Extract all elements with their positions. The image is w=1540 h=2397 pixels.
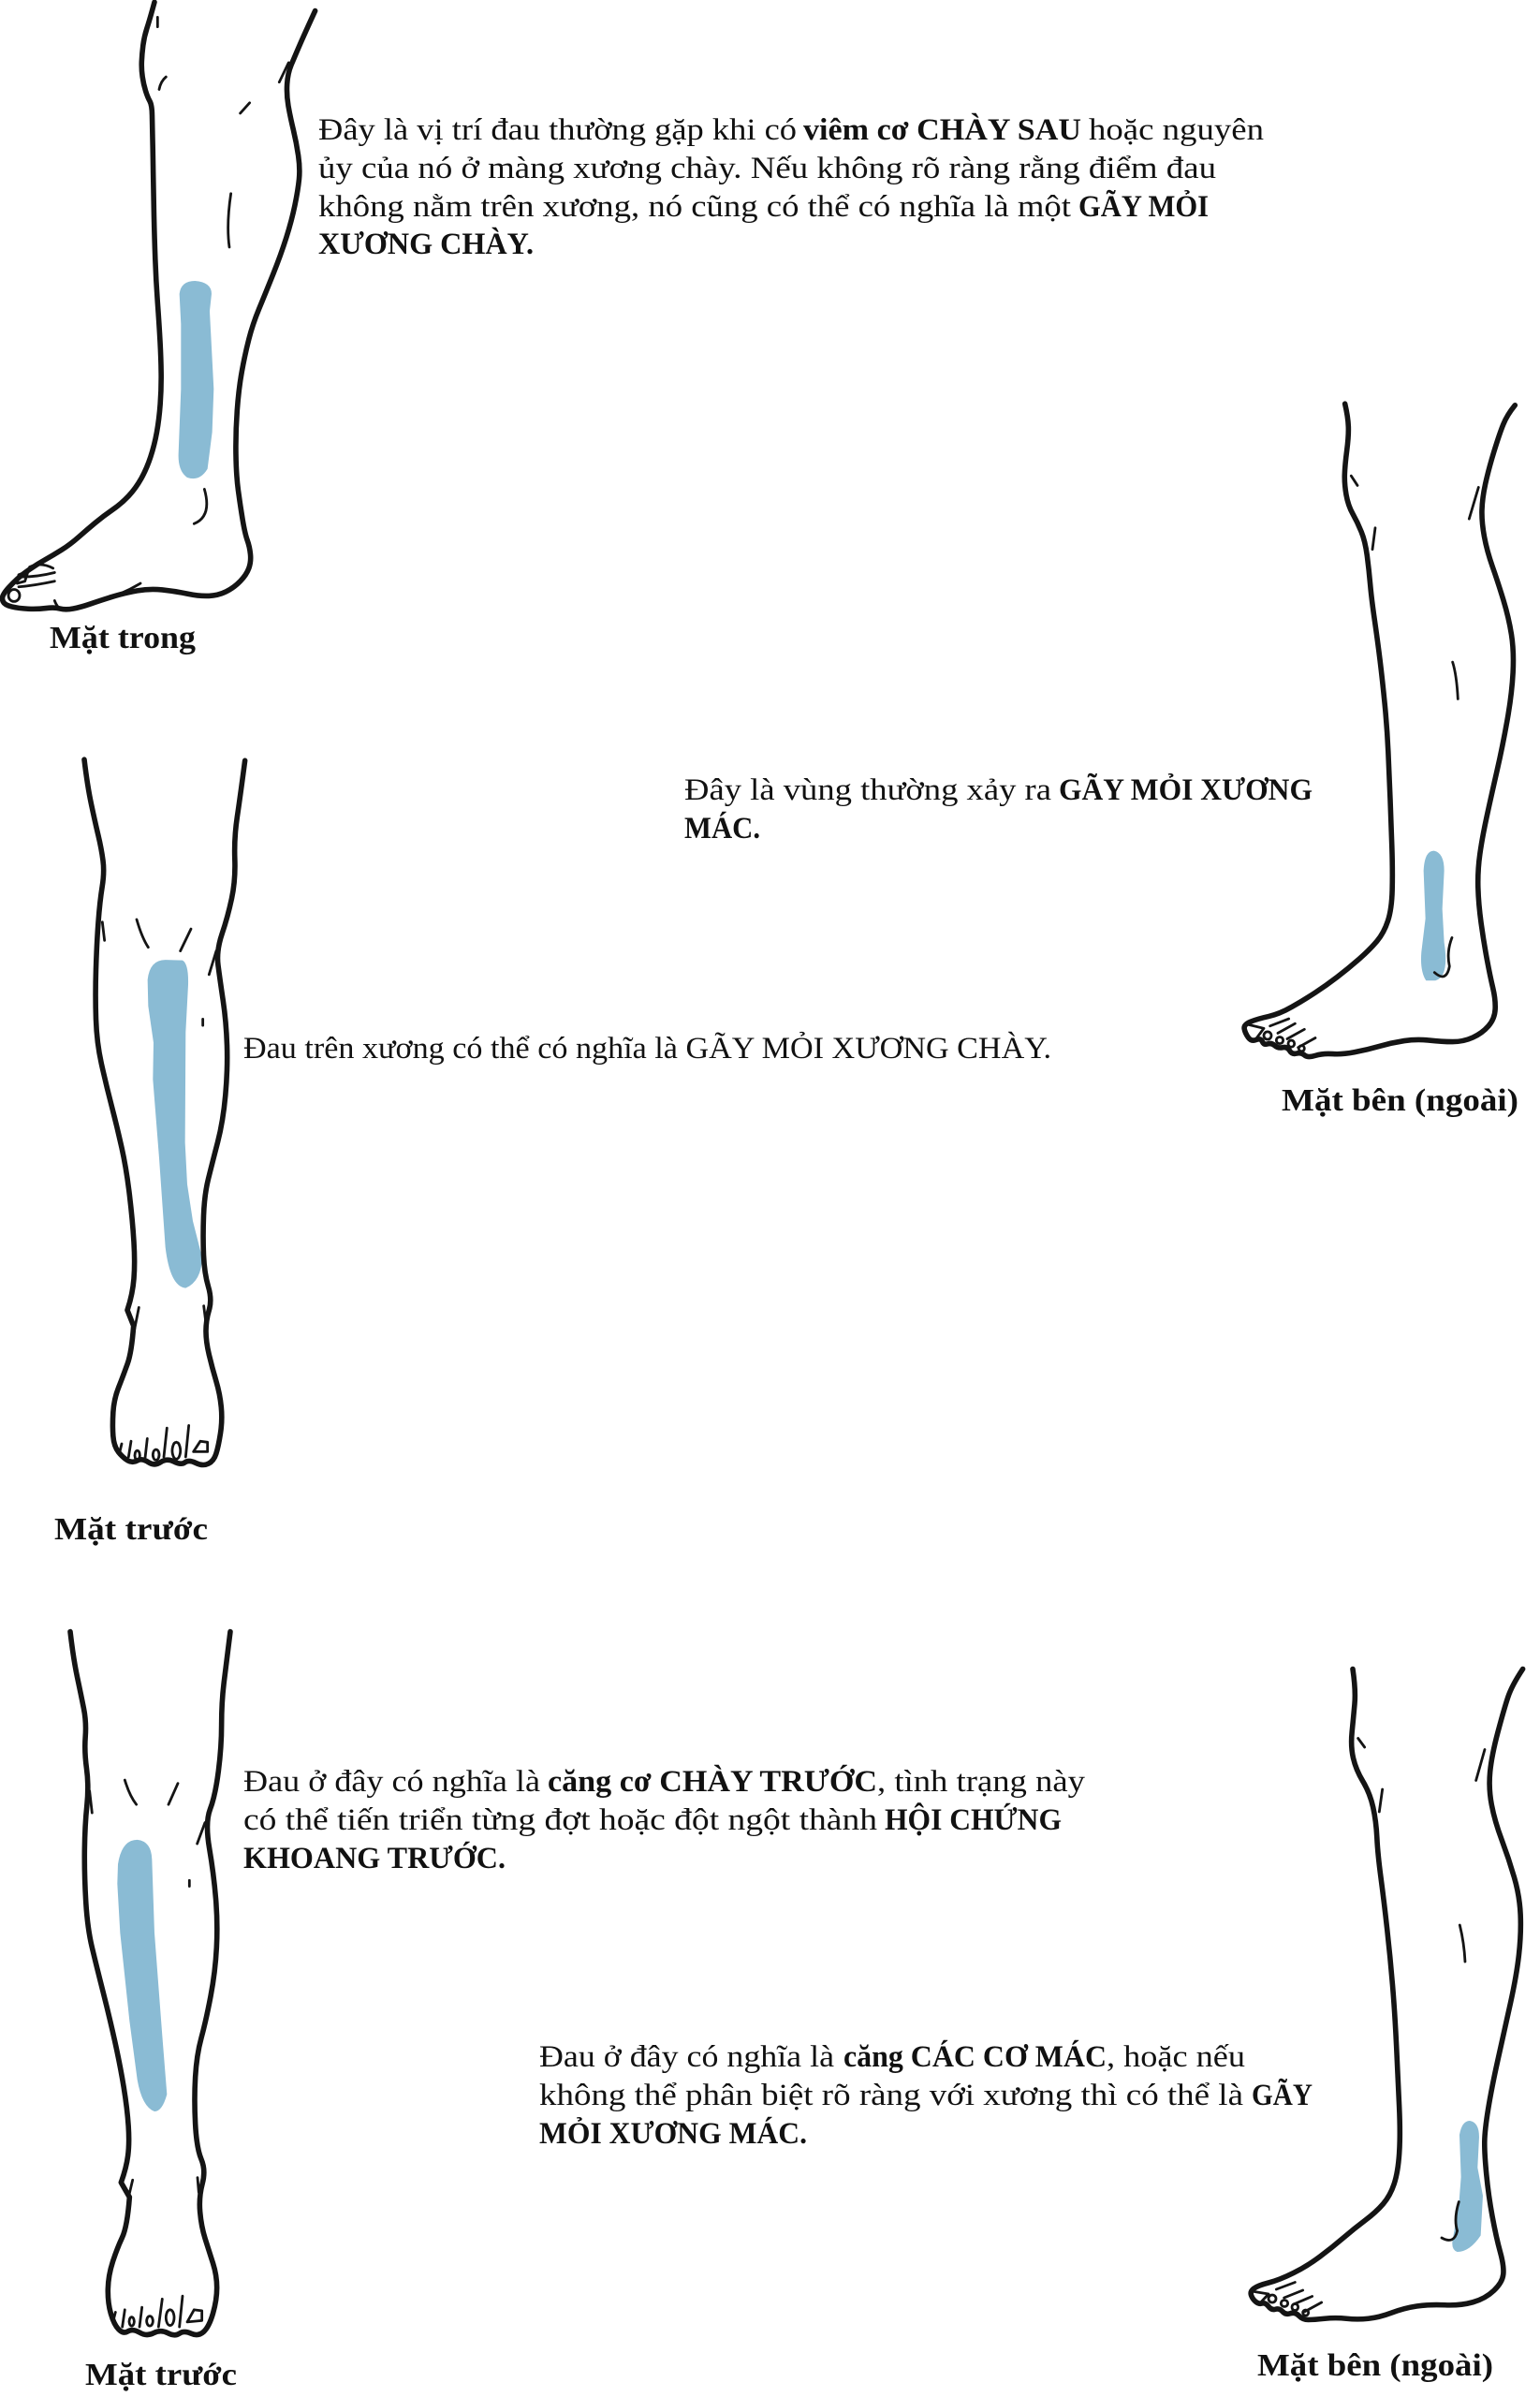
panel: outer side leg view, fibula: [1244, 404, 1518, 1118]
text block: fibula stress fracture: [684, 772, 1313, 846]
toes: [1269, 2295, 1309, 2316]
label: outer side lower: Mặt bên (ngoài): [1257, 2348, 1493, 2383]
pain zone: fibula stress fracture: [1421, 851, 1445, 980]
text block: fibula stress fracture: Đây là vùng thường xảy ra: [684, 773, 1051, 807]
big toe: [8, 589, 20, 601]
leg illustration: inner side: [2, 2, 315, 610]
label: front lower: Mặt trước: [85, 2358, 237, 2392]
leg outline: [2, 2, 315, 610]
leg illustration: front: [84, 759, 245, 1464]
leg outline: [1244, 404, 1515, 1057]
text block: fibula stress fracture: GÃY MỎI XƯƠNG: [1059, 772, 1313, 807]
pain zone: posterior tibial: [179, 281, 213, 478]
panel: front leg view, tibia: [54, 759, 245, 1547]
leg detail lines: [1254, 1738, 1485, 2312]
leg outline: [84, 759, 245, 1464]
leg outline: [70, 1632, 230, 2335]
text block: posterior tibial explanation: XƯƠNG CHÀY.: [318, 227, 534, 261]
leg illustration: outer side: [1244, 404, 1515, 1057]
label: front: Mặt trước: [54, 1512, 208, 1547]
pain zone: anterior tibial: [117, 1840, 167, 2111]
text block: posterior tibial explanation: không nằm trên xương, nó cũng có thể có nghĩa là một: [318, 190, 1071, 224]
text block: peroneal explanation: [539, 2039, 1313, 2151]
text block: peroneal explanation: GÃY: [1252, 2078, 1313, 2112]
text block: fibula stress fracture: MÁC.: [684, 811, 760, 846]
text block: anterior tibial explanation: có thể tiến triển từng đợt hoặc đột ngột thành: [243, 1803, 878, 1837]
text block: posterior tibial explanation: ủy của nó ở màng xương chày. Nếu không rõ ràng rằng điểm đau: [318, 152, 1216, 185]
leg illustration: outer side lower: [1251, 1669, 1523, 2320]
leg detail lines: [1248, 476, 1478, 1048]
text block: posterior tibial explanation: GÃY MỎI: [1078, 188, 1209, 224]
label: inner side: Mặt trong: [50, 621, 196, 655]
text block: peroneal explanation: căng CÁC CƠ MÁC: [843, 2039, 1107, 2074]
panel: inner side leg view: [2, 2, 315, 655]
toes: [1264, 1032, 1304, 1051]
label: outer side: Mặt bên (ngoài): [1282, 1083, 1518, 1118]
text block: peroneal explanation: , hoặc nếu: [1107, 2040, 1245, 2074]
text block: anterior tibial explanation: [243, 1763, 1086, 1875]
text block: peroneal explanation: không thể phân biệt rõ ràng với xương thì có thể là: [539, 2079, 1243, 2112]
leg detail lines: [102, 919, 216, 1458]
leg detail lines: [17, 17, 288, 610]
text block: anterior tibial explanation: Đau ở đây có nghĩa là: [243, 1765, 540, 1799]
leg illustration: front lower: [70, 1632, 230, 2335]
leg detail lines: [90, 1780, 205, 2327]
text block: posterior tibial explanation: hoặc nguyên: [1089, 113, 1264, 147]
panel: front leg view, anterior tibial: [70, 1632, 237, 2392]
pain zone: peroneal: [1452, 2121, 1483, 2252]
toes: [135, 1441, 208, 1460]
text block: posterior tibial explanation: [318, 112, 1264, 261]
text block: anterior tibial explanation: HỘI CHỨNG: [885, 1801, 1062, 1837]
text block: peroneal explanation: Đau ở đây có nghĩa là: [539, 2040, 834, 2074]
text block: peroneal explanation: MỎI XƯƠNG MÁC.: [539, 2115, 807, 2151]
text block: anterior tibial explanation: căng cơ CHÀY TRƯỚC: [548, 1763, 877, 1799]
toes: [129, 2310, 202, 2326]
leg outline: [1251, 1669, 1523, 2320]
text block: tibia pain: Đau trên xương có thể có nghĩa là GÃY MỎI XƯƠNG CHÀY.: [243, 1031, 1051, 1066]
pain zone: tibia stress fracture: [148, 960, 202, 1288]
panel: outer side leg view, peroneal: [1251, 1669, 1523, 2383]
text block: posterior tibial explanation: viêm cơ CHÀY SAU: [803, 112, 1081, 147]
text block: anterior tibial explanation: KHOANG TRƯỚC.: [243, 1840, 506, 1875]
text block: anterior tibial explanation: , tình trạng này: [877, 1765, 1086, 1799]
text block: posterior tibial explanation: Đây là vị trí đau thường gặp khi có: [318, 113, 797, 147]
